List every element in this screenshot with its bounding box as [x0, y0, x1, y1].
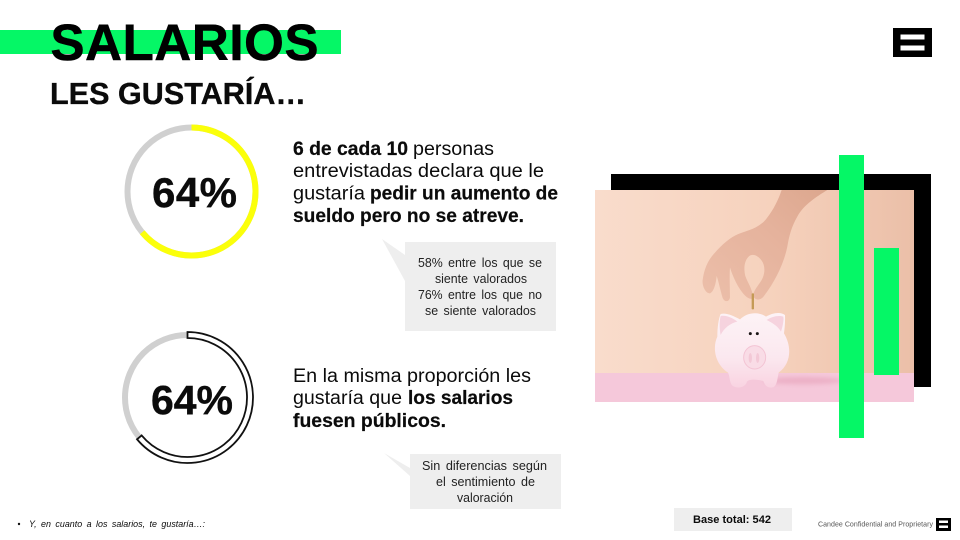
text block: pedir un aumento: personas	[413, 139, 494, 160]
footnote: Y, en cuanto a los salarios, te gustaría…:	[29, 519, 205, 529]
callout: sin diferencias: valoración	[457, 491, 513, 505]
photo panel: piggy bank	[595, 155, 931, 438]
callout: valorados: 76% entre los que no	[418, 288, 542, 302]
callout: sin diferencias: Sin diferencias según	[422, 459, 547, 473]
icon: small brand logo	[936, 518, 951, 531]
text block: salarios públicos	[293, 366, 531, 432]
callout: sin diferencias	[384, 453, 561, 509]
text block: pedir un aumento: 6 de cada 10	[293, 139, 408, 160]
text block: pedir un aumento: entrevistadas declara que le	[293, 161, 544, 182]
text block: salarios públicos: los salarios	[408, 388, 513, 409]
text block: pedir un aumento: sueldo pero no se atreve.	[293, 206, 524, 227]
confidentiality note: Candee Confidential and Proprietary	[818, 522, 934, 528]
donut chart: 64% black outline: 64%	[151, 377, 233, 423]
callout: valorados: se siente valorados	[425, 304, 536, 318]
callout: valorados: 58% entre los que se	[418, 256, 542, 270]
base total label	[674, 508, 792, 531]
donut chart: 64% black outline	[125, 332, 253, 463]
base total label: Base total: 542	[693, 514, 771, 526]
green vertical bar short	[874, 248, 899, 375]
text block: pedir un aumento	[293, 139, 558, 227]
piggy bank	[715, 313, 789, 388]
callout: valorados	[382, 239, 556, 331]
text block: pedir un aumento: gustaría	[293, 184, 365, 204]
icon: brand logo	[893, 28, 932, 57]
coin	[752, 293, 754, 309]
text block: pedir un aumento: pedir un aumento de	[370, 184, 558, 204]
title: SALARIOS	[50, 14, 318, 71]
black backing frame	[611, 174, 931, 387]
callout: valorados: siente valorados	[435, 272, 527, 286]
donut chart: 64% yellow: 64%	[152, 169, 237, 216]
callout: sin diferencias: el sentimiento de	[436, 475, 535, 489]
hand	[703, 190, 827, 301]
donut chart: 64% yellow	[128, 128, 256, 256]
title highlight bar	[0, 30, 341, 54]
photo: hand dropping coin in piggy bank	[595, 190, 914, 402]
text block: salarios públicos: En la misma proporción les	[293, 366, 531, 387]
green vertical bar tall	[839, 155, 864, 438]
subtitle: LES GUSTARÍA…	[50, 76, 306, 111]
text block: salarios públicos: fuesen públicos.	[293, 411, 446, 432]
text block: salarios públicos: gustaría que	[293, 388, 402, 409]
